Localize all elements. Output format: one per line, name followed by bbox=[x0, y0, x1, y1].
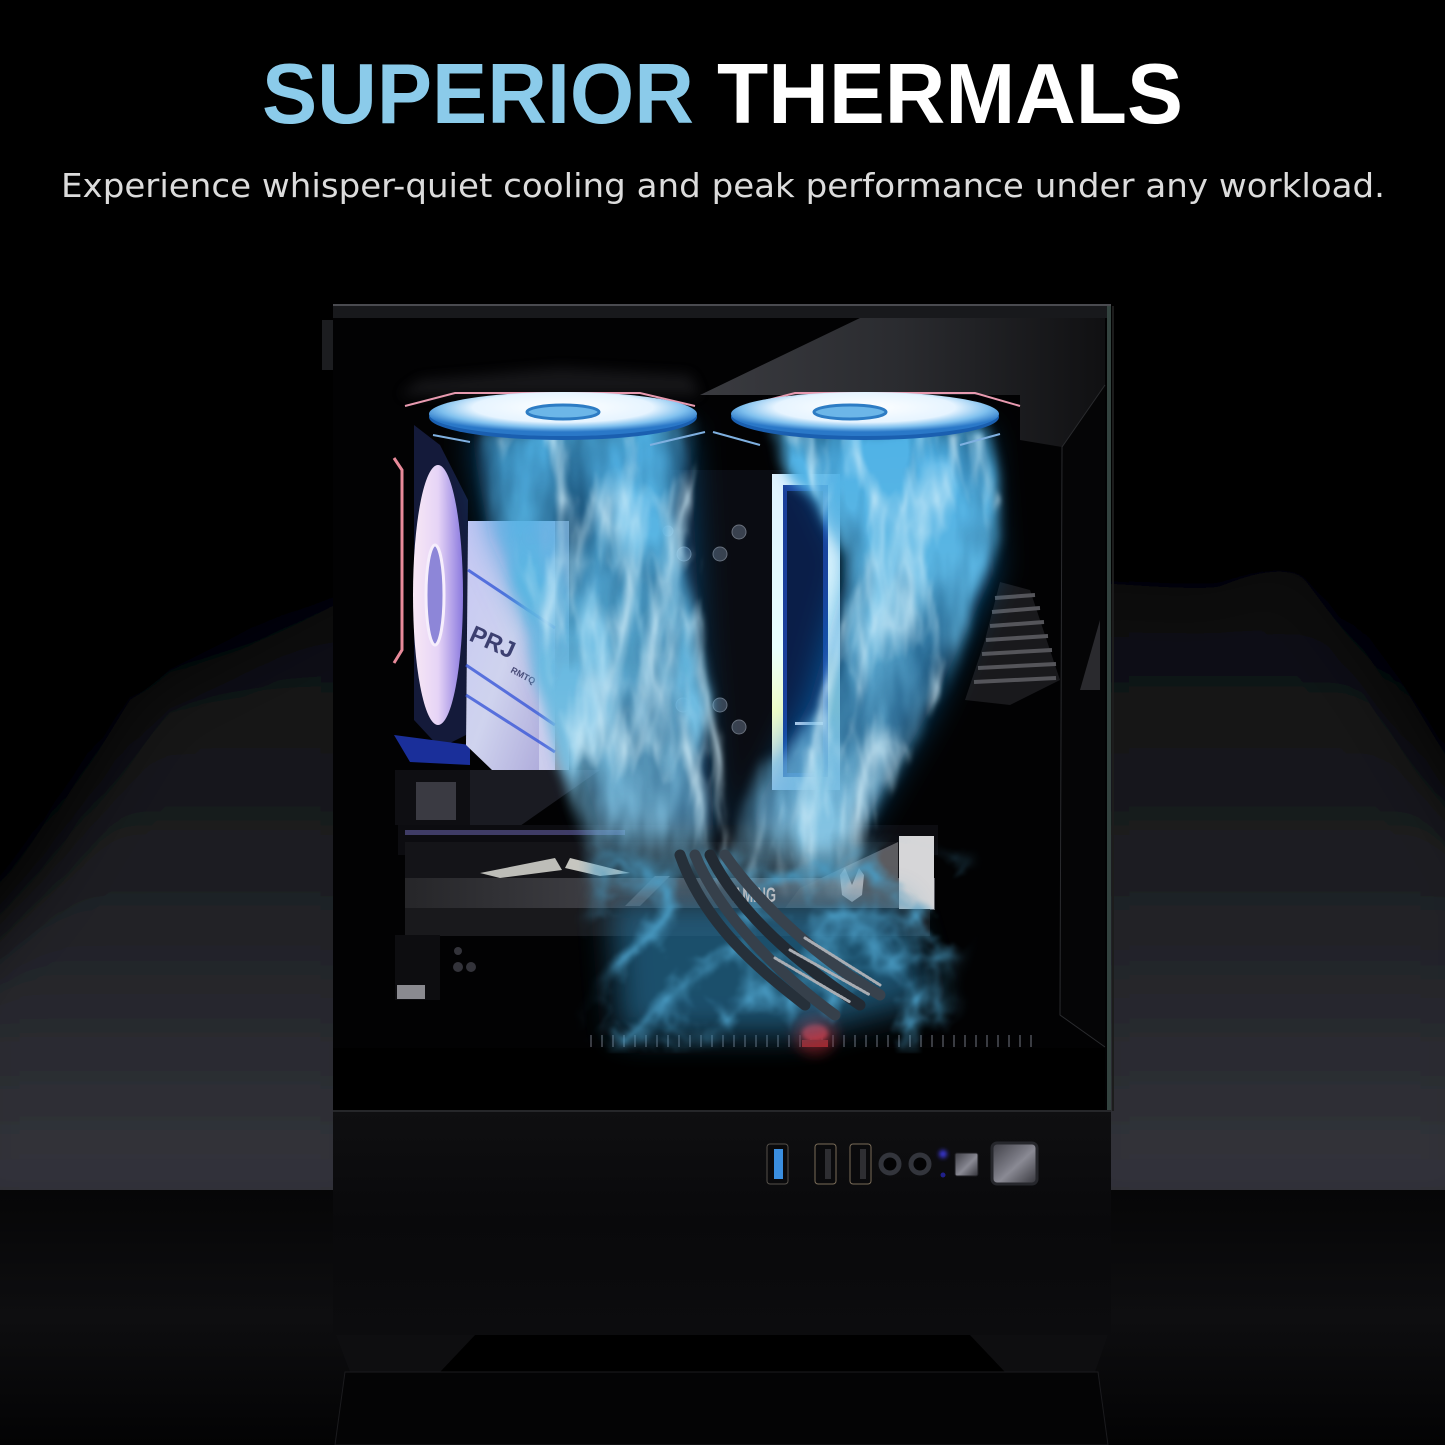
smoke column right bbox=[715, 425, 990, 890]
smoke wisps bbox=[490, 425, 985, 890]
motherboard lower bbox=[395, 935, 1040, 1055]
top fan left bbox=[405, 392, 705, 445]
reset button bbox=[955, 1153, 978, 1176]
usb 3 port bbox=[767, 1144, 788, 1184]
smoke column left bbox=[490, 425, 730, 890]
title: THERMALS bbox=[717, 47, 1183, 142]
lower smoke cloud bbox=[585, 850, 950, 1035]
audio jacks bbox=[881, 1155, 929, 1173]
pc case bbox=[322, 304, 1114, 1111]
side fan bbox=[394, 425, 470, 765]
interior components bbox=[394, 458, 835, 830]
gpu logo text: AMING bbox=[733, 884, 776, 907]
front io panel bbox=[333, 1110, 1111, 1335]
sleeved cables right bbox=[965, 582, 1060, 705]
graphics card bbox=[398, 825, 938, 936]
cooling smoke bbox=[470, 425, 995, 1035]
floor reflection bbox=[335, 1372, 1108, 1445]
top fan right bbox=[713, 392, 1020, 445]
lower smoke base bbox=[610, 900, 930, 1035]
glow under smoke bbox=[470, 430, 995, 830]
cooler heatsink: PRJ bbox=[466, 621, 519, 664]
usb ports bbox=[815, 1144, 871, 1184]
title bbox=[262, 47, 1183, 142]
power button bbox=[992, 1143, 1037, 1184]
title: SUPERIOR bbox=[262, 47, 694, 142]
subtitle: Experience whisper-quiet cooling and peak performance under any workload. bbox=[61, 166, 1385, 205]
case feet bbox=[336, 1335, 1108, 1372]
cooler heatsink: RMTQ bbox=[509, 665, 537, 686]
status leds bbox=[939, 1150, 947, 1178]
cooler heatsink bbox=[466, 521, 569, 770]
glass body bbox=[322, 304, 1114, 1111]
cpu block screws bbox=[663, 525, 746, 734]
rgb light bar bbox=[772, 474, 840, 790]
power cables bbox=[680, 855, 880, 1015]
